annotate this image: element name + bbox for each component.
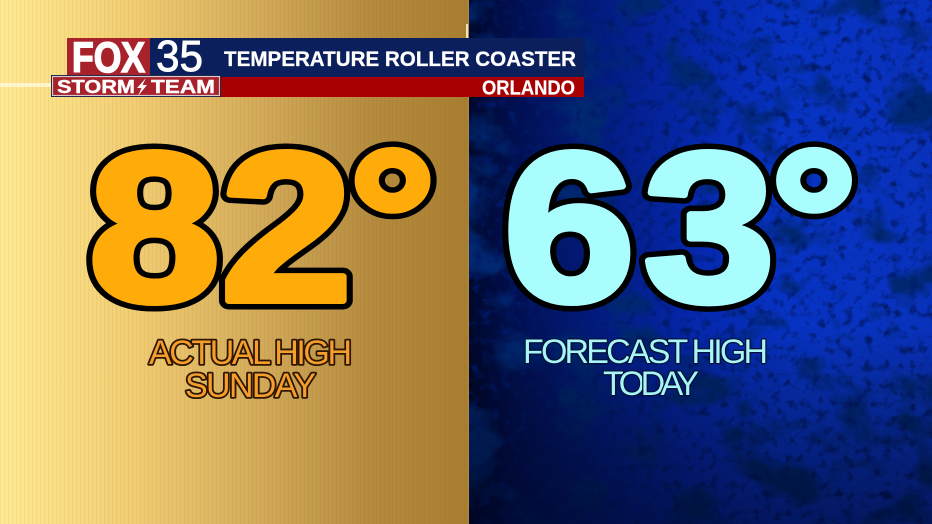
- panel: blue background, forecast high: [468, 0, 932, 524]
- big temperature: 63 degrees: °: [770, 109, 857, 328]
- caption: actual high sunday: [149, 334, 352, 405]
- big temperature: 82 degrees: [89, 109, 436, 346]
- caption: forecast high today: [523, 333, 768, 403]
- big temperature: 82 degrees: 2: [221, 109, 352, 346]
- logo: FOX 35: FOX: [72, 34, 145, 82]
- caption: actual high sunday: ACTUAL HIGH: [149, 334, 352, 372]
- big temperature: 82 degrees: 2: [221, 109, 352, 346]
- big temperature: 63 degrees: °: [770, 109, 857, 328]
- logo: storm team badge: STORM: [57, 77, 135, 97]
- panel: gold background, actual high: [0, 0, 468, 524]
- caption: actual high sunday: SUNDAY: [185, 367, 316, 405]
- logo: FOX 35: 35: [156, 32, 203, 81]
- banner title: TEMPERATURE ROLLER COASTER: [224, 48, 576, 71]
- big temperature: 63 degrees: [504, 109, 857, 346]
- headline banner: [51, 32, 584, 100]
- caption: forecast high today: FORECAST HIGH: [523, 333, 768, 371]
- big temperature: 63 degrees: 6: [504, 109, 635, 346]
- big temperature: 82 degrees: °: [349, 109, 436, 328]
- logo: FOX 35: [67, 32, 206, 82]
- caption: forecast high today: TODAY: [603, 365, 699, 403]
- big temperature: 82 degrees: °: [349, 109, 436, 328]
- big temperature: 82 degrees: 8: [89, 109, 220, 346]
- logo: storm team badge: TEAM: [151, 77, 215, 97]
- big temperature: 63 degrees: 3: [643, 109, 775, 346]
- logo: storm team badge: [51, 75, 221, 97]
- big temperature: 63 degrees: 3: [643, 109, 775, 346]
- big temperature: 82 degrees: 8: [89, 109, 220, 346]
- banner location: ORLANDO: [482, 78, 575, 100]
- big temperature: 63 degrees: 6: [504, 109, 635, 346]
